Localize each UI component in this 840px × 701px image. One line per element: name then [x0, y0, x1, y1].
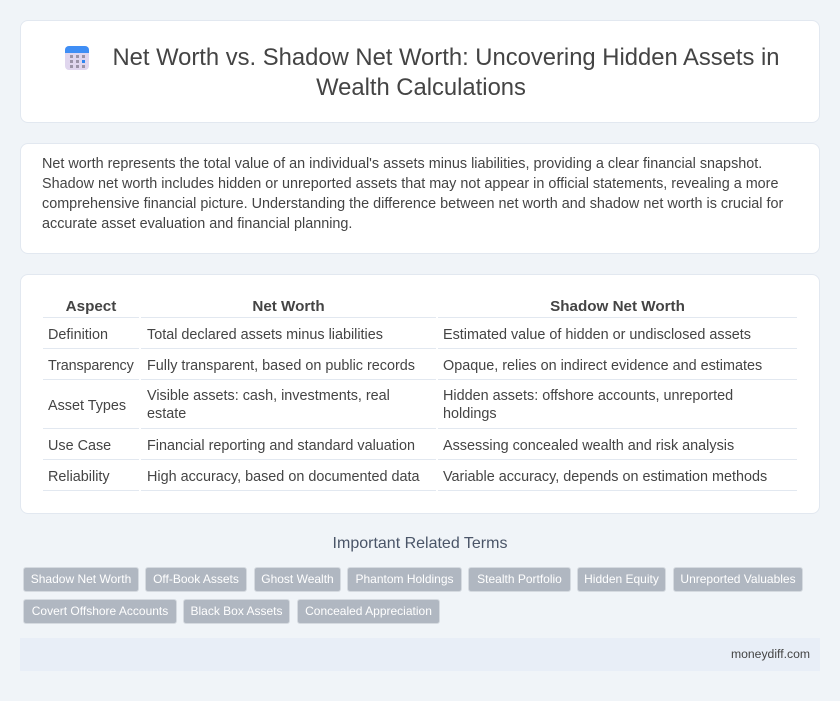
tag: Unreported Valuables [680, 572, 796, 586]
table header: Net Worth [252, 298, 325, 315]
title [112, 44, 780, 101]
tag: Phantom Holdings [355, 572, 454, 586]
related terms tags [23, 567, 803, 624]
table card [20, 274, 820, 514]
row: definition: Estimated value of hidden or undisclosed assets [443, 327, 751, 343]
row: use case: Financial reporting and standard valuation [147, 438, 415, 454]
tag: Concealed Appreciation [305, 604, 432, 618]
tag [297, 599, 440, 624]
row: transparency: Fully transparent, based on public records [147, 358, 415, 374]
icon: calendar [65, 46, 89, 70]
intro text: Net worth represents the total value of an individual's assets minus liabilities, providing a clear financial snapshot. [42, 156, 762, 172]
row: definition [48, 327, 751, 343]
tag [577, 567, 666, 592]
tag [468, 567, 571, 592]
title: Net Worth vs. Shadow Net Worth: Uncovering Hidden Assets in [112, 44, 780, 71]
row: asset types: Hidden assets: offshore accounts, unreported [443, 388, 733, 404]
table header [66, 298, 685, 315]
row: definition: Definition [48, 327, 108, 343]
row: reliability: Variable accuracy, depends on estimation methods [443, 469, 767, 485]
tag [347, 567, 462, 592]
tag: Black Box Assets [190, 604, 283, 618]
tag [254, 567, 341, 592]
row: asset types: estate [147, 406, 186, 422]
table header: Aspect [66, 298, 116, 315]
tag: Off-Book Assets [153, 572, 239, 586]
tag [183, 599, 290, 624]
tag [145, 567, 247, 592]
row: use case [48, 438, 734, 454]
intro card [20, 143, 820, 254]
tag: Hidden Equity [584, 572, 659, 586]
row: transparency: Opaque, relies on indirect evidence and estimates [443, 358, 762, 374]
row: reliability: Reliability [48, 469, 110, 485]
row: asset types: Asset Types [48, 398, 126, 414]
row: use case: Use Case [48, 438, 111, 454]
header card [20, 20, 820, 123]
row: transparency [48, 358, 762, 374]
row: reliability: High accuracy, based on documented data [147, 469, 420, 485]
tag [23, 599, 177, 624]
intro text [42, 156, 784, 232]
intro text: comprehensive financial picture. Understanding the difference between net worth and shadow net worth is crucial for [42, 196, 783, 212]
intro text: Shadow net worth includes hidden or unreported assets that may not appear in official statements, revealing a more [42, 176, 778, 192]
footer bar [20, 638, 820, 671]
comparison table [43, 298, 797, 491]
intro text: accurate asset evaluation and financial planning. [42, 216, 352, 232]
table header: Shadow Net Worth [550, 298, 685, 315]
title: Wealth Calculations [316, 74, 526, 101]
row: definition: Total declared assets minus liabilities [147, 327, 383, 343]
row: use case: Assessing concealed wealth and risk analysis [443, 438, 734, 454]
row: asset types: holdings [443, 406, 497, 422]
tag [23, 567, 139, 592]
tag: Stealth Portfolio [477, 572, 562, 586]
tag: Ghost Wealth [261, 572, 334, 586]
tag [673, 567, 803, 592]
tag: Shadow Net Worth [31, 572, 131, 586]
row: asset types [48, 388, 733, 422]
related terms heading: Important Related Terms [333, 535, 507, 552]
row: asset types: Visible assets: cash, investments, real [147, 388, 390, 404]
footer source: moneydiff.com [731, 647, 810, 661]
row: transparency: Transparency [48, 358, 134, 374]
row: reliability [48, 469, 767, 485]
tag: Covert Offshore Accounts [32, 604, 168, 618]
